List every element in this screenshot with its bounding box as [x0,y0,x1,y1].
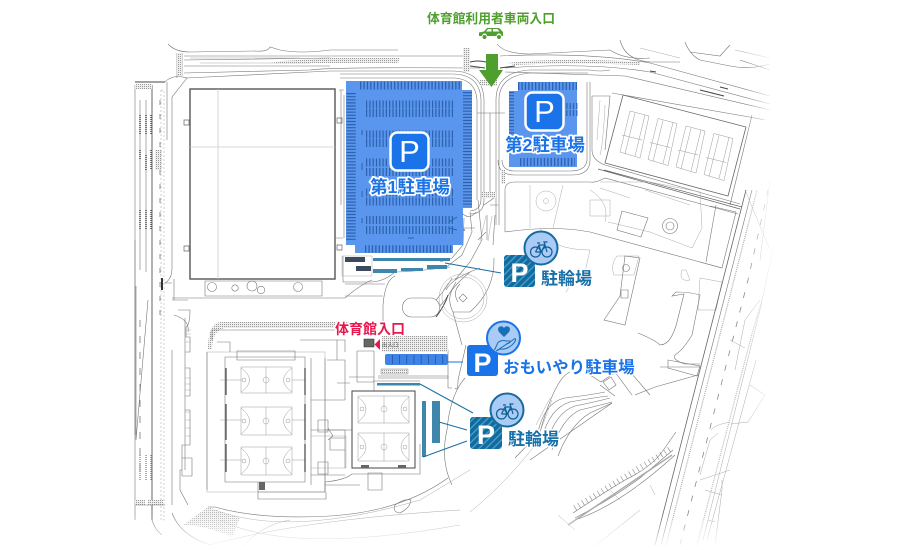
entrance label: gymnasium: 出入口 [382,341,399,349]
arrow: entrance direction [479,54,503,87]
label: おもいやり駐車場 [503,357,635,377]
heading: vehicle entrance: 体育館利用者車両入口 [427,11,555,26]
icon: car [479,28,503,39]
tennis courts [592,93,765,209]
bicycle parking bars [373,258,450,457]
curved path bundle [515,372,676,550]
icon: P [467,345,498,378]
sub gymnasium [325,351,420,490]
label: second parking lot: 第2駐車場 [505,135,585,155]
diagonal road on the right [655,180,775,545]
callout lines [420,263,501,457]
left road [135,76,210,545]
icon: heart in hand [487,322,520,354]
entrance plaza and roundabout [342,256,494,485]
label: first parking lot: 第1駐車場 [370,177,450,197]
icon: parking P [390,132,428,170]
entrance label: gymnasium: 体育館入口 [335,321,405,337]
icon: bicycle P: P [477,420,495,450]
accessible parking bays [385,354,448,365]
icon: bicycle [524,232,558,264]
callout: accessible parking [467,322,635,378]
entrance label: gymnasium [335,321,405,350]
large empty building [172,89,345,300]
top road [168,40,770,110]
parking 1 surrounding road [186,70,610,280]
icon: parking P: P [534,94,555,129]
callout: bicycle parking south [470,394,559,450]
icon: P: P [473,348,492,378]
panel: first parking lot [346,81,472,253]
icon: bicycle [490,394,524,426]
park area [505,178,738,396]
south landscape curves [183,432,545,550]
icon: parking P: P [399,134,420,169]
main gymnasium [207,330,360,499]
icon: bicycle P: P [510,258,529,288]
gymnasium parking hatch [208,322,448,381]
label: 駐輪場 [508,429,559,449]
panel: second parking lot [505,82,585,167]
callout: bicycle parking north [504,232,592,288]
label: 駐輪場 [541,268,592,288]
